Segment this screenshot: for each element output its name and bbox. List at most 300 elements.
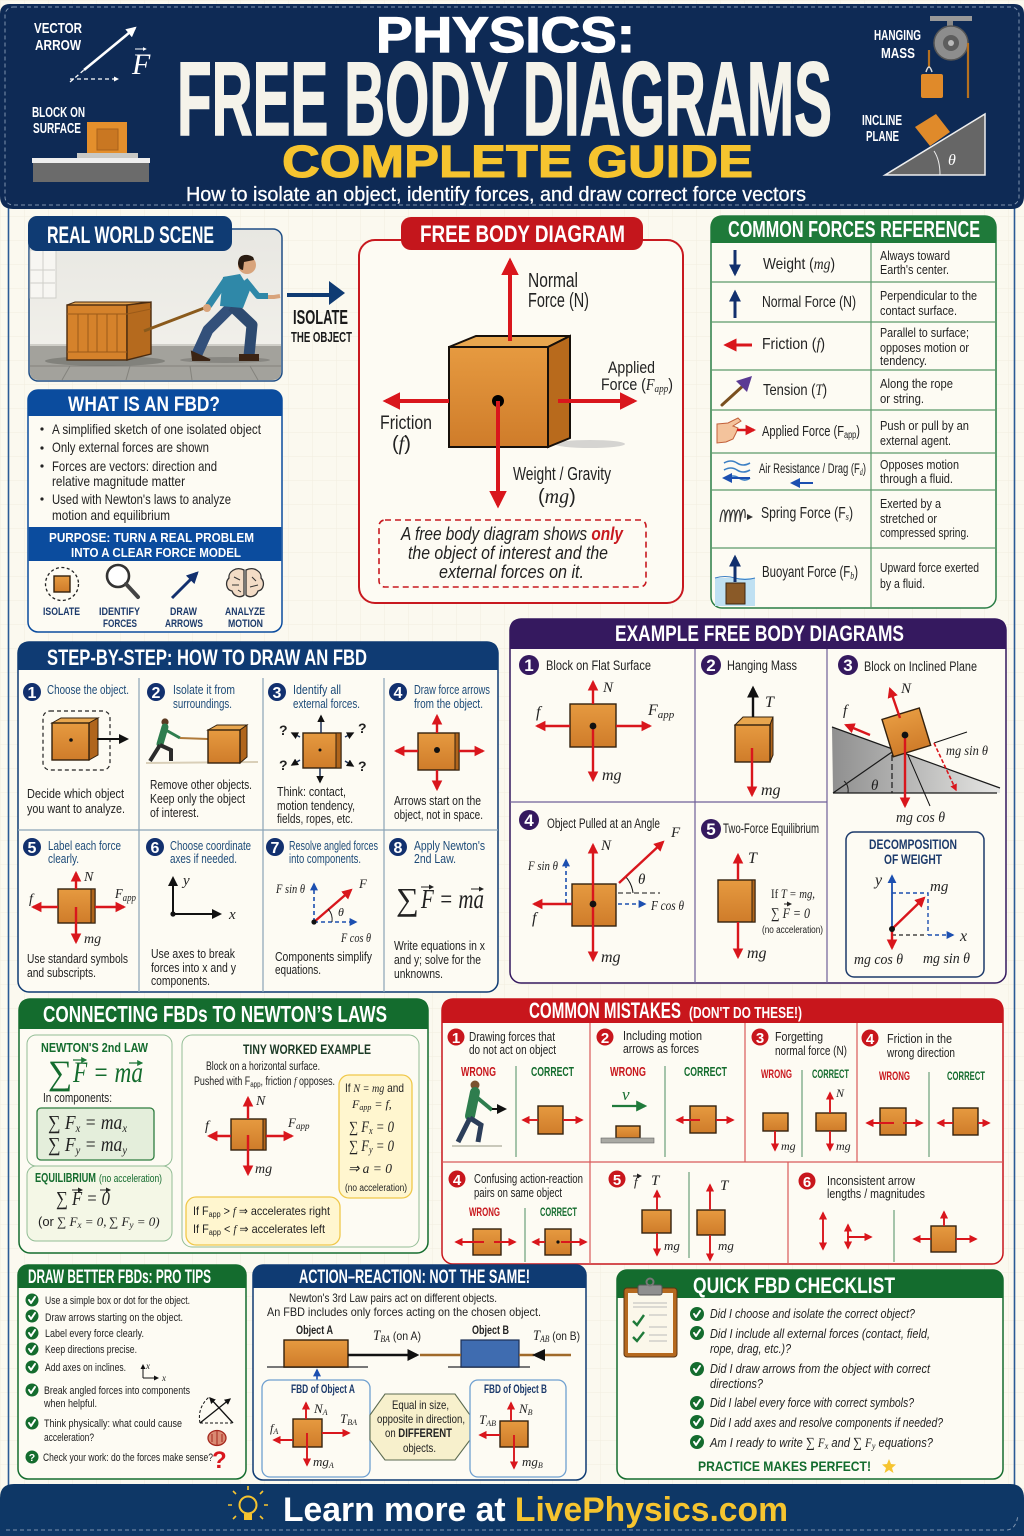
step 4: Draw force arrows: [414, 683, 490, 697]
step 2: Remove other objects.: [150, 778, 252, 792]
step 1: 1: [28, 685, 37, 702]
step 3: [268, 683, 367, 826]
mistake 5: 5: [613, 1172, 621, 1189]
checklist items: Did I choose and isolate the correct object?: [710, 1307, 915, 1321]
mistake 6: [798, 1172, 976, 1262]
arrow: applied force: ): [668, 375, 673, 394]
step 6: x: [228, 907, 236, 923]
checklist items: Am I ready to write ∑ F: [710, 1436, 826, 1451]
step 7: θ: [338, 905, 344, 919]
row: buoyant force: [715, 557, 979, 606]
icon: draw arrows: DRAW: [170, 606, 197, 618]
yellow note: balanced case: ∑ F: [349, 1138, 371, 1155]
example 3: block on inclined plane: mg cos θ: [896, 810, 946, 826]
example 4: object pulled at an angle: f: [532, 910, 539, 927]
purpose band: PURPOSE: TURN A REAL PROBLEM: [49, 530, 254, 545]
row: spring force: [720, 496, 969, 540]
step 7: F cos θ: [340, 931, 371, 945]
heading: examples: EXAMPLE FREE BODY DIAGRAMS: [615, 621, 904, 646]
step 4: object, not in space.: [394, 808, 483, 822]
mistake 4: friction direction: WRONG: [879, 1069, 910, 1083]
icon: draw arrows: [165, 573, 203, 630]
step 8: unknowns.: [394, 967, 443, 981]
card: tiny worked example: , friction: [261, 1076, 294, 1088]
step 5: clearly.: [48, 852, 79, 866]
step 5: [23, 838, 136, 980]
step 2: Keep only the object: [150, 792, 245, 806]
card: Newton's 2nd law: F = ma: [72, 1056, 143, 1089]
row: spring force: ): [849, 505, 853, 522]
mistake 4: friction direction: CORRECT: [947, 1069, 985, 1083]
step 3: ?: [358, 758, 367, 774]
row: friction: tendency.: [880, 353, 927, 368]
card: FBD of object A: A: [272, 1427, 278, 1436]
step 6: axes if needed.: [170, 852, 237, 866]
arrow: applied force: app: [655, 383, 669, 395]
arrow: applied force: [558, 358, 673, 401]
example 4: object pulled at an angle: F: [670, 825, 681, 841]
step 5: N: [83, 870, 94, 885]
example 2: hanging mass: [701, 655, 797, 799]
row: spring force: stretched or: [880, 511, 938, 526]
checklist of tips: ?: [29, 1452, 35, 1464]
icon: hanging mass: [874, 16, 972, 98]
mistake 2: WRONG: [610, 1065, 646, 1079]
bullet list: Forces are vectors: direction and: [52, 458, 217, 474]
yellow note: balanced case: F: [352, 1097, 359, 1111]
icon: vector arrow: VECTOR: [34, 20, 82, 37]
checklist items: rope, drag, etc.)?: [710, 1342, 791, 1356]
mistake 3: mg: [836, 1139, 851, 1153]
purpose band: [29, 527, 281, 561]
mistake 3: 3: [756, 1030, 764, 1047]
yellow note: balanced case: = f,: [371, 1097, 392, 1111]
heading tab: free body diagram: [401, 217, 643, 250]
card: tiny worked example: f opposes.: [294, 1076, 346, 1088]
yellow note: balanced case: ⇒ a = 0: [348, 1162, 392, 1177]
card: tiny worked example: TINY WORKED EXAMPLE: [243, 1041, 371, 1057]
checklist of tips: acceleration?: [44, 1432, 94, 1444]
inset: decomposition of weight: y: [873, 872, 883, 889]
checklist of tips: Add axes on inclines.: [45, 1362, 126, 1374]
arrow: weight: (mg): [538, 486, 576, 508]
step 1: [23, 683, 129, 816]
icon: clipboard: [624, 1278, 677, 1357]
step 5: f: [29, 892, 35, 907]
mistake 3: [752, 1028, 851, 1157]
step 1: Choose the object.: [47, 683, 129, 697]
card: equilibrium: (or: [38, 1214, 55, 1229]
diagram: objects A and B with rope: (on A): [390, 1329, 421, 1343]
card: FBD of object A: N: [314, 1401, 323, 1416]
row: applied force: Applied Force (F: [762, 423, 873, 440]
mistake 5: T: [720, 1178, 730, 1194]
card: Newton's 2nd law: x: [75, 1121, 81, 1135]
intro text: Newton's 3rd Law pairs act on different objects.: [289, 1291, 497, 1305]
yellow note: balanced case: If N = mg and: [345, 1081, 404, 1095]
panel: pro tips: [18, 1265, 246, 1479]
icon: block on surface: SURFACE: [33, 121, 81, 137]
icon: small axes: [143, 1361, 166, 1383]
checklist items: ∑ F: [853, 1436, 873, 1451]
block: [449, 336, 625, 448]
row: air resistance: Opposes motion: [880, 457, 959, 472]
example 4: object pulled at an angle: N: [600, 838, 612, 854]
mistake 5: [608, 1170, 734, 1260]
step 2: [146, 683, 258, 820]
arrow: normal force: [510, 261, 589, 341]
example 1: block on flat surface: F: [648, 702, 658, 719]
heading: step by step: STEP-BY-STEP: HOW TO DRAW AN FBD: [47, 645, 367, 670]
card: equilibrium: (no acceleration): [99, 1173, 162, 1185]
yellow note: balanced case: ∑ F: [349, 1119, 371, 1136]
yellow note: unbalanced cases: >: [221, 1204, 233, 1218]
example 5: two-force equilibrium: T: [748, 850, 758, 867]
card: equilibrium: ∑ F = 0: [56, 1188, 110, 1210]
checklist items: Did I draw arrows from the object with correct: [710, 1362, 930, 1376]
subtitle: How to isolate an object, identify forces, and draw correct force vectors: [186, 184, 806, 206]
mistake: action-reaction pairs: WRONG: [469, 1205, 500, 1219]
icon: isolate: ISOLATE: [43, 606, 80, 618]
icon: hanging mass: HANGING: [874, 28, 921, 44]
step 7: 7: [271, 840, 280, 857]
bullet list: motion and equilibrium: [52, 507, 170, 523]
icon: question mark: ?: [212, 1447, 227, 1474]
row: friction: Friction (f): [762, 336, 825, 353]
card: Newton's 2nd law: y: [121, 1143, 128, 1157]
card: tiny worked example: app: [250, 1080, 261, 1089]
example 5: two-force equilibrium: (no acceleration): [762, 925, 823, 936]
illustration: man pulling crate: [30, 250, 281, 380]
mistake 6: 6: [803, 1174, 811, 1191]
callout: equal in size: opposite in direction,: [377, 1412, 465, 1426]
arrow: normal force: Normal: [528, 270, 578, 292]
card: FBD of object B: FBD of Object B: [484, 1384, 547, 1396]
panel: connecting FBDs to Newton's laws: [19, 999, 428, 1253]
inset: decomposition of weight: mg cos θ: [854, 952, 903, 968]
mistake 2: Including motion: [623, 1029, 702, 1043]
inset: decomposition of weight: mg sin θ: [923, 951, 970, 967]
icon: block on surface: BLOCK ON: [32, 105, 85, 121]
icon: analyze motion: ANALYZE: [225, 606, 265, 618]
footer banner: [0, 1484, 1024, 1536]
mistake 1: Drawing forces that: [469, 1030, 555, 1044]
mistake 5: f: [634, 1174, 640, 1189]
example 1: block on flat surface: f: [536, 704, 543, 721]
card: FBD of object A: A: [322, 1408, 328, 1417]
mistake 2: CORRECT: [684, 1065, 727, 1079]
mistake: action-reaction pairs: [448, 1170, 586, 1262]
row: weight: Weight (mg): [763, 256, 835, 273]
row: air resistance: ): [863, 460, 866, 476]
step 3: Think: contact,: [277, 785, 346, 799]
callout: equal in size: objects.: [403, 1441, 436, 1455]
step 2: Isolate it from: [173, 683, 235, 697]
callout: definition: external forces on it.: [439, 562, 584, 582]
mistake 1: [448, 1028, 582, 1157]
card: FBD of object B: B: [538, 1461, 543, 1470]
checklist items: and: [828, 1436, 853, 1450]
row: friction: Parallel to surface;: [880, 325, 969, 340]
arrow: isolate the object: [287, 281, 352, 346]
icon: block on surface: [32, 105, 150, 182]
heading: pro tips: [18, 1265, 246, 1288]
card: tiny worked example: mg: [255, 1162, 272, 1177]
step 4: 4: [394, 685, 403, 702]
step 7: into components.: [289, 852, 361, 866]
example 5: two-force equilibrium: 5: [706, 820, 716, 839]
arrow: isolate the object: ISOLATE: [293, 307, 348, 329]
step 8: Write equations in x: [394, 939, 486, 953]
diagram: objects A and B with rope: T: [373, 1328, 382, 1344]
row: friction: opposes motion or: [880, 340, 970, 355]
card: tiny worked example: Pushed with F: [194, 1076, 267, 1088]
mistake 2: arrows as forces: [623, 1042, 699, 1056]
mistake 5: mg: [664, 1238, 680, 1253]
mistake: action-reaction pairs: 4: [453, 1172, 462, 1189]
card: FBD of object B: N: [519, 1401, 528, 1416]
row: tension: Tension (T): [763, 382, 827, 399]
diagram: objects A and B with rope: [267, 1325, 580, 1380]
checklist of tips: Keep directions precise.: [45, 1344, 137, 1356]
checklist items: Did I label every force with correct symbols?: [710, 1396, 914, 1410]
row: applied force: Push or pull by an: [880, 418, 969, 433]
bullet list: relative magnitude matter: [52, 473, 185, 489]
card: FBD of object B: T: [479, 1412, 486, 1427]
row: tension: Along the rope: [880, 376, 953, 391]
row: normal force: [735, 288, 977, 318]
example 5: two-force equilibrium: If T = mg,: [771, 887, 815, 901]
mistake 5: mg: [718, 1238, 734, 1253]
card: equilibrium: ∑ F: [57, 1214, 77, 1229]
yellow note: balanced case: x: [368, 1126, 373, 1137]
bullet list: Used with Newton's laws to analyze: [52, 491, 231, 507]
card: equilibrium: = 0,: [81, 1214, 107, 1229]
row: applied force: ): [856, 423, 860, 440]
step 3: external forces.: [293, 697, 360, 711]
closing line: practice makes perfect: PRACTICE MAKES PERFECT!: [698, 1458, 871, 1474]
step 3: ?: [279, 757, 288, 773]
icon: hanging mass: MASS: [881, 46, 915, 62]
checklist items: Did I add axes and resolve components if needed?: [710, 1416, 943, 1430]
row: air resistance: Air Resistance / Drag (F: [759, 460, 908, 476]
step 3: ?: [279, 722, 288, 738]
step 8: and y; solve for the: [394, 953, 481, 967]
heading: quick checklist: [617, 1270, 1003, 1298]
step 3: 3: [273, 685, 282, 702]
heading: connecting FBDs: CONNECTING FBDs TO NEWTON’S LAWS: [43, 1001, 387, 1027]
mistake 3: CORRECT: [812, 1067, 849, 1081]
mistake 6: Inconsistent arrow: [827, 1174, 916, 1188]
step 6: y: [181, 873, 190, 889]
icon: vector arrow: ARROW: [35, 37, 82, 54]
row: buoyant force: by a fluid.: [880, 576, 925, 591]
card: tiny worked example: N: [255, 1094, 266, 1109]
title: physics: PHYSICS:: [376, 7, 635, 63]
step 6: Choose coordinate: [170, 839, 251, 853]
diagram: objects A and B with rope: (on B): [549, 1329, 580, 1343]
card: tiny worked example: Block on a horizontal surface.: [206, 1061, 320, 1073]
row: spring force: compressed spring.: [880, 525, 969, 540]
inset: decomposition of weight: mg: [930, 879, 949, 895]
step 7: equations.: [275, 963, 321, 977]
mistake 2: v: [622, 1085, 630, 1104]
step 2: surroundings.: [173, 697, 232, 711]
yellow note: balanced case: (no acceleration): [345, 1183, 407, 1194]
callout: definition: the object of interest and the: [408, 543, 608, 563]
card: tiny worked example: f: [205, 1119, 211, 1134]
heading: action-reaction: [253, 1265, 586, 1288]
step 8: F = ma: [420, 884, 484, 914]
callout: equal in size: [370, 1394, 470, 1460]
checklist items: Did I include all external forces (contact, field,: [710, 1327, 930, 1341]
mistake 3: mg: [781, 1139, 796, 1153]
mistake 4: friction direction: 4: [866, 1031, 875, 1048]
row: air resistance: d: [860, 467, 863, 477]
panel: action-reaction: [253, 1265, 586, 1480]
icon: vector arrow: F: [131, 48, 151, 81]
step 2: 2: [152, 685, 161, 702]
example 1: block on flat surface: app: [658, 709, 675, 721]
step 3: Identify all: [293, 683, 341, 697]
diagram: objects A and B with rope: AB: [539, 1334, 550, 1344]
row: buoyant force: Buoyant Force (F: [762, 564, 886, 581]
heading: quick checklist: QUICK FBD CHECKLIST: [693, 1273, 895, 1298]
example 3: block on inclined plane: [832, 655, 1000, 826]
checklist of tips: when helpful.: [43, 1398, 97, 1410]
example 4: object pulled at an angle: [519, 810, 684, 966]
example 4: object pulled at an angle: 4: [524, 811, 534, 830]
title: complete guide: COMPLETE GUIDE: [282, 136, 753, 187]
yellow note: unbalanced cases: f ⇒ accelerates left: [233, 1222, 334, 1236]
icon: vector arrow: [34, 20, 151, 82]
card: FBD of object B: mg: [522, 1454, 538, 1469]
mistake 5: T: [651, 1173, 661, 1189]
panel: common mistakes: [442, 998, 1003, 1264]
step 6: [146, 838, 251, 988]
icon: identify forces: FORCES: [103, 618, 137, 630]
arrow: friction: (f): [392, 433, 411, 455]
row: friction: [726, 325, 970, 368]
row: buoyant force: b: [850, 570, 855, 582]
checklist items: x: [824, 1441, 828, 1451]
yellow note: balanced case: [339, 1075, 412, 1198]
card: equilibrium: = 0): [133, 1214, 160, 1229]
callout: definition: [379, 520, 646, 587]
intro text: [267, 1291, 541, 1319]
card: FBD of object A: [262, 1380, 370, 1477]
step 3: ?: [358, 720, 367, 736]
arrow: friction: [380, 401, 449, 455]
example 2: hanging mass: Hanging Mass: [727, 658, 797, 673]
card: FBD of object A: BA: [347, 1418, 357, 1427]
example 3: block on inclined plane: θ: [871, 778, 879, 794]
card: FBD of object A: T: [340, 1411, 347, 1426]
checklist items: [690, 1307, 943, 1451]
purpose band: INTO A CLEAR FORCE MODEL: [71, 545, 241, 560]
example 5: two-force equilibrium: ∑ F = 0: [771, 906, 810, 922]
card: FBD of object A: FBD of Object A: [291, 1384, 355, 1396]
card: Newton's 2nd law: NEWTON'S 2nd LAW: [41, 1040, 149, 1055]
step 4: [389, 683, 490, 822]
row: normal force: contact surface.: [880, 303, 957, 318]
step 5: and subscripts.: [27, 966, 96, 980]
heading: action-reaction: ACTION–REACTION: NOT THE SAME!: [299, 1267, 530, 1288]
mistake 3: N: [835, 1086, 845, 1100]
mistake 6: lengths / magnitudes: [827, 1187, 925, 1201]
mistake 2: 2: [601, 1030, 609, 1047]
mistake 1: 1: [452, 1030, 460, 1047]
step 6: components.: [151, 974, 210, 988]
heading tab: real world scene: [28, 216, 232, 251]
row: applied force: external agent.: [880, 433, 951, 448]
icon: identify forces: [99, 565, 141, 630]
diagram: objects A and B with rope: Object B: [472, 1325, 509, 1337]
heading tab: free body diagram: FREE BODY DIAGRAM: [420, 221, 625, 248]
yellow note: balanced case: app: [359, 1103, 371, 1112]
row: spring force: Spring Force (F: [761, 505, 872, 522]
checklist of tips: Think physically: what could cause: [44, 1418, 182, 1430]
example 5: two-force equilibrium: [701, 819, 823, 962]
mistake: action-reaction pairs: CORRECT: [540, 1205, 577, 1219]
step 8: 8: [394, 840, 403, 857]
heading: common mistakes: COMMON MISTAKES: [529, 998, 681, 1023]
yellow note: unbalanced cases: <: [221, 1222, 233, 1236]
example 4: object pulled at an angle: mg: [601, 949, 621, 966]
yellow note: unbalanced cases: If F: [193, 1204, 210, 1218]
card: Newton's 2nd law: y: [75, 1143, 81, 1157]
icon: isolate: [43, 568, 80, 618]
checklist of tips: [26, 1294, 213, 1464]
heading: what is an FBD: [28, 390, 282, 416]
bullet list: [40, 421, 261, 523]
intro text: An FBD includes only forces acting on the chosen object.: [267, 1305, 541, 1319]
card: FBD of object A: mg: [313, 1454, 329, 1469]
inset: decomposition of weight: x: [959, 928, 967, 945]
mistake 4: friction direction: wrong direction: [886, 1046, 955, 1060]
example 4: object pulled at an angle: F sin θ: [527, 858, 559, 873]
diagram: objects A and B with rope: BA: [380, 1334, 390, 1344]
card: Newton's 2nd law: = ma: [80, 1134, 122, 1156]
step 5: Use standard symbols: [27, 952, 128, 966]
diagram: objects A and B with rope: T: [533, 1328, 541, 1344]
checklist of tips: Check your work: do the forces make sense?: [43, 1452, 213, 1464]
inset: decomposition of weight: OF WEIGHT: [884, 852, 943, 867]
example 3: block on inclined plane: 3: [843, 656, 853, 675]
mistake: action-reaction pairs: Confusing action-reaction: [474, 1172, 583, 1186]
heading: what is an FBD: WHAT IS AN FBD?: [68, 393, 220, 416]
step 6: forces into x and y: [151, 961, 237, 975]
row: tension: [722, 376, 953, 406]
card: equilibrium: [27, 1166, 172, 1241]
mistake 2: [596, 1028, 733, 1157]
example 4: object pulled at an angle: Object Pulled at an Angle: [547, 816, 660, 831]
step 6: 6: [151, 840, 160, 857]
card: equilibrium: EQUILIBRIUM: [35, 1171, 96, 1185]
step 6: Use axes to break: [151, 947, 236, 961]
panel: example free body diagrams: [510, 619, 1006, 983]
step 4: from the object.: [414, 697, 483, 711]
card: Newton's 2nd law: In components:: [43, 1091, 112, 1105]
card: FBD of object A: A: [328, 1461, 334, 1470]
card: FBD of object B: AB: [485, 1419, 496, 1428]
icon: light bulb: [228, 1486, 268, 1520]
step 5: 5: [28, 840, 37, 857]
arrow: applied force: Applied: [608, 358, 655, 377]
row: spring force: Exerted by a: [880, 496, 942, 511]
arrow: weight: [498, 401, 611, 508]
checklist of tips: Draw arrows starting on the object.: [45, 1312, 183, 1324]
